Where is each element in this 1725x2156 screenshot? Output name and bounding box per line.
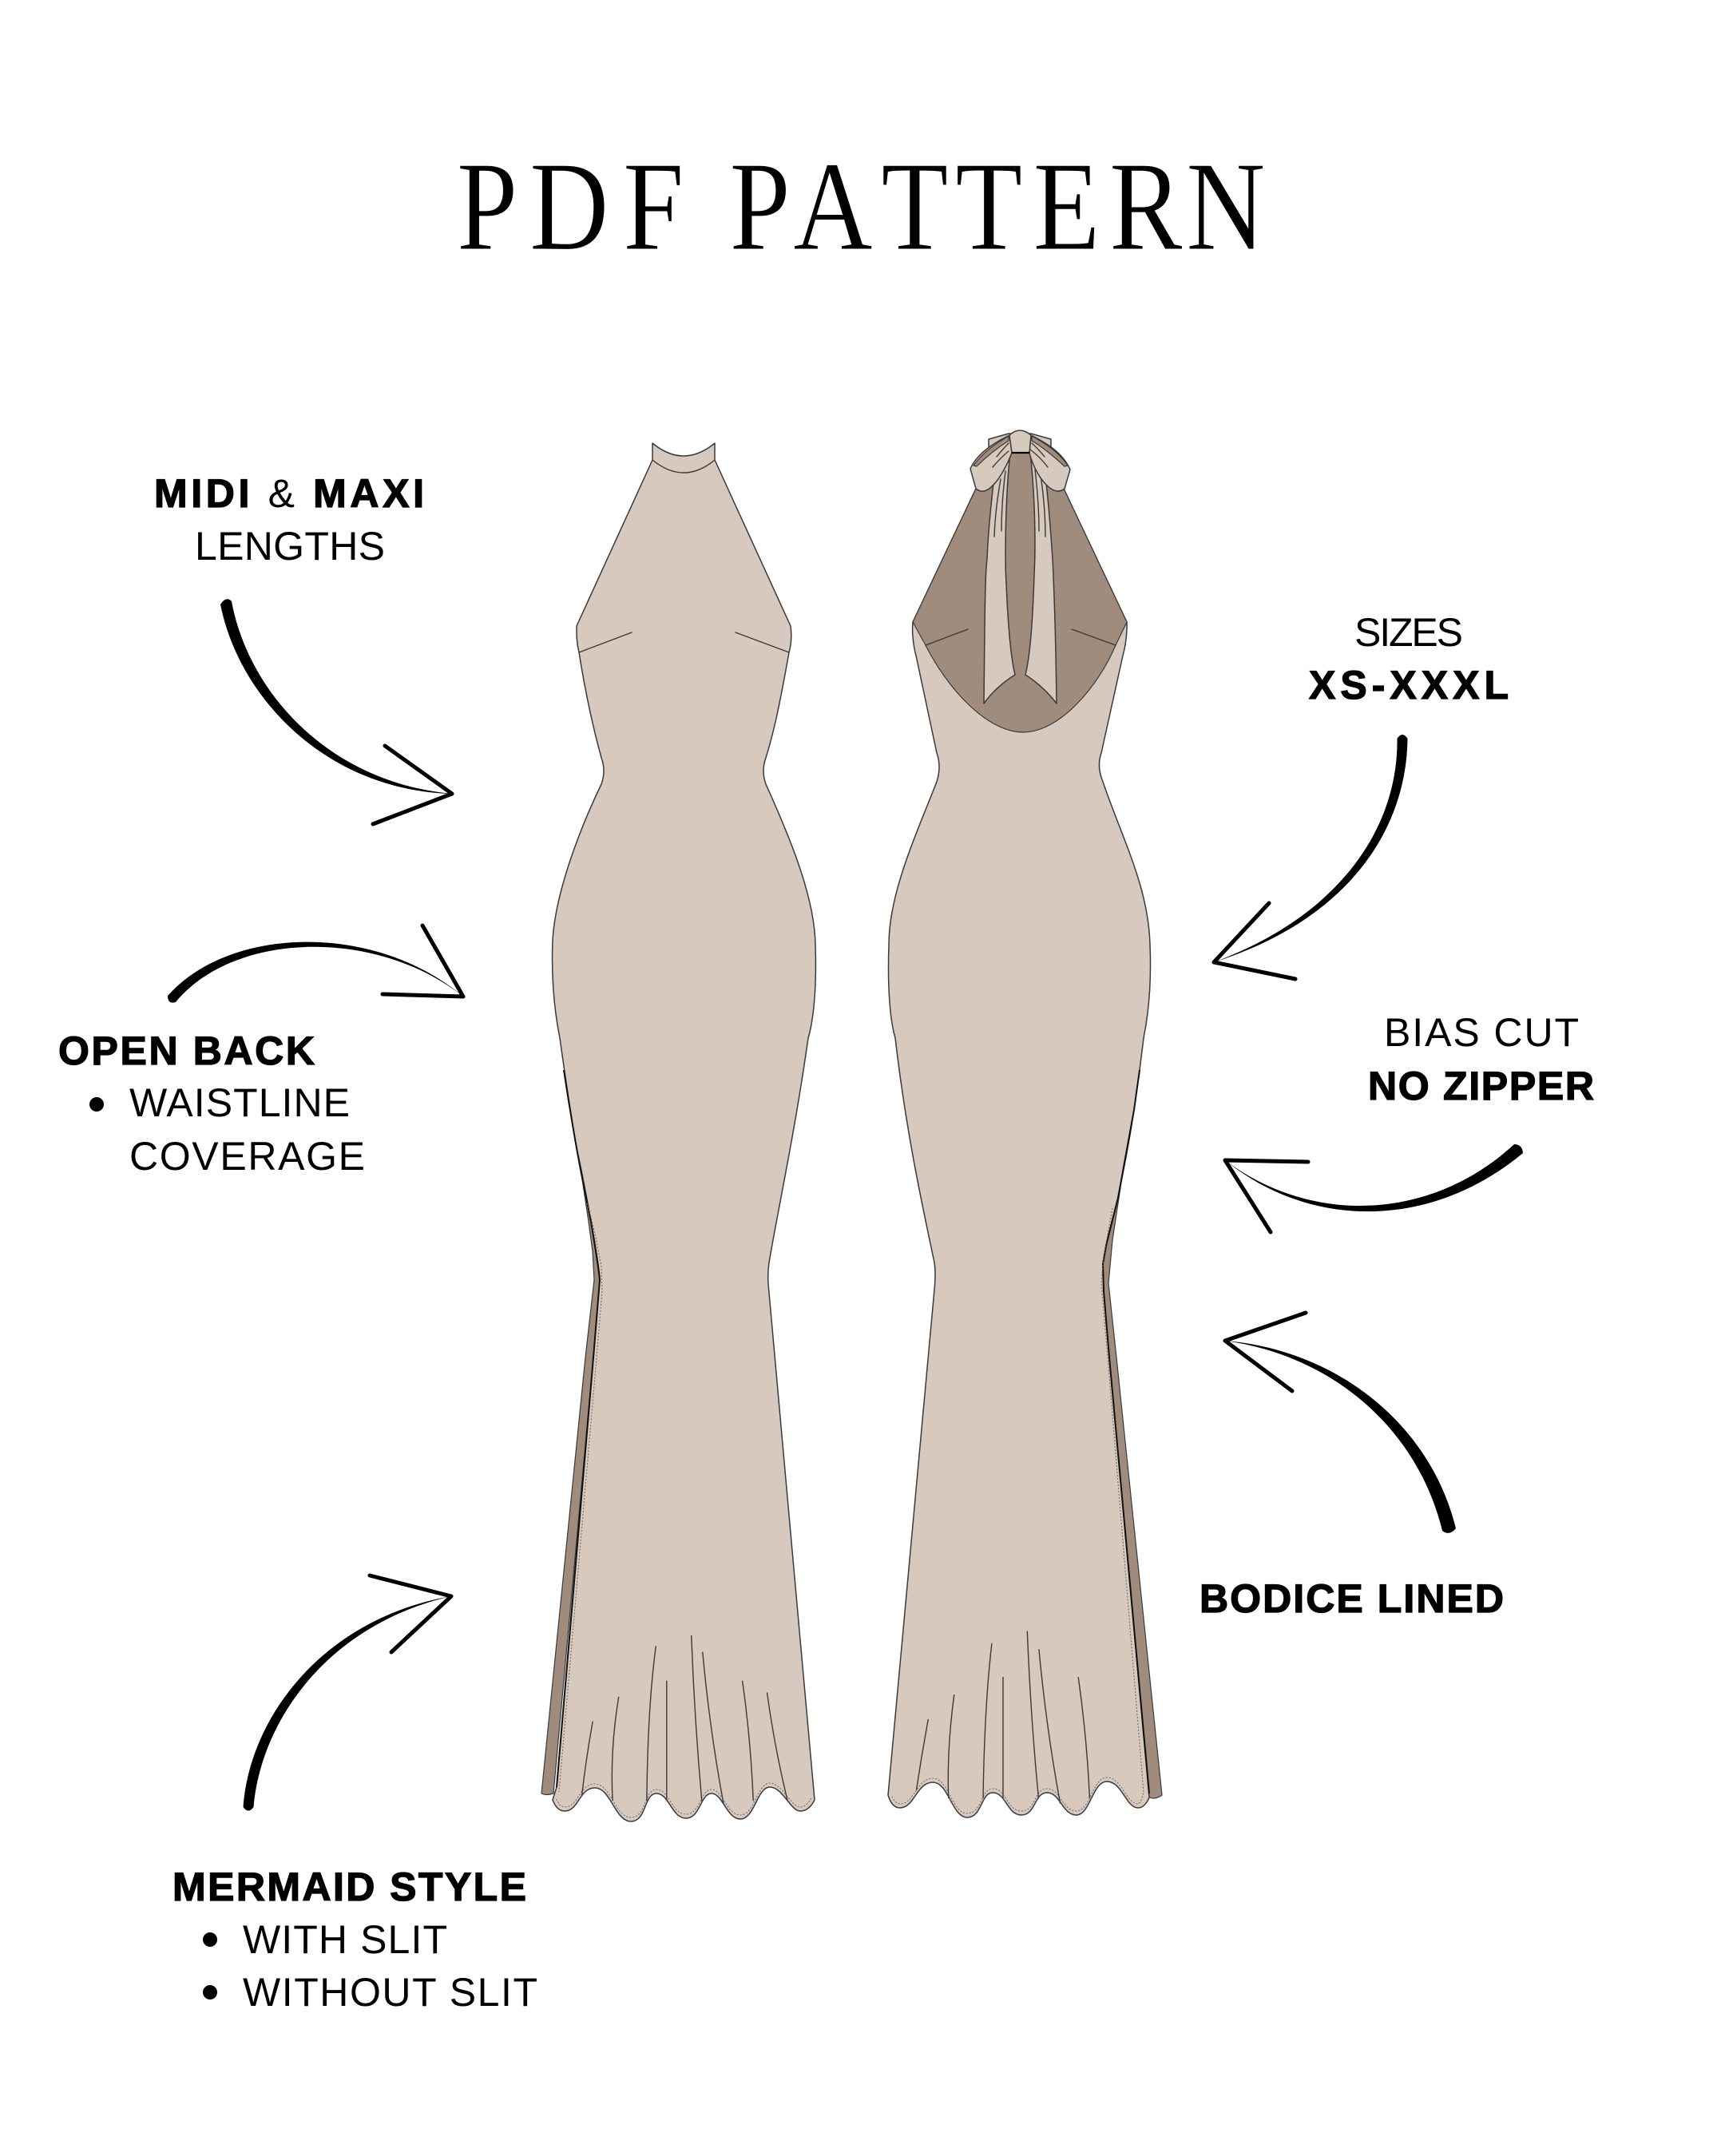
tie gathers [994, 470, 1045, 537]
front dress: collar seam [652, 460, 715, 473]
callout: open back [58, 1028, 365, 1179]
callout: mermaid style: MERMAID STYLE [172, 1865, 526, 1909]
bow right loop [1029, 435, 1070, 491]
callout: mermaid style [172, 1865, 537, 2015]
callout: open back: COVERAGE [129, 1134, 365, 1179]
bow knot [1009, 430, 1031, 453]
front dress: body [553, 443, 815, 1821]
front dress: stitching [556, 1203, 811, 1817]
arrow: midi and maxi lengths [220, 599, 452, 824]
back dress: darts [926, 629, 1116, 645]
callout: open back: OPEN BACK [58, 1028, 315, 1073]
front dress: hem pleats [582, 1635, 787, 1803]
callout: sizes: SIZES [1354, 610, 1463, 655]
back dress: hem pleats [917, 1631, 1089, 1803]
front dress: bust darts [579, 632, 789, 652]
callout: midi and maxi lengths: LENGTHS [195, 524, 385, 569]
bullet [203, 1985, 217, 1999]
callout: bodice lined: BODICE LINED [1200, 1576, 1504, 1621]
bow back layer [989, 434, 1051, 447]
front dress: slit lining [541, 1174, 600, 1795]
callout: bias cut, no zipper: NO ZIPPER [1368, 1064, 1594, 1108]
callout: mermaid style: WITHOUT SLIT [243, 1970, 537, 2015]
callout: mermaid style: WITH SLIT [243, 1917, 447, 1962]
arrow: mermaid style [243, 1575, 451, 1811]
arrow: open back [168, 925, 463, 1003]
bow folds [993, 443, 1048, 467]
callout: sizes [1309, 610, 1509, 707]
callout: bias cut, no zipper: BIAS CUT [1384, 1010, 1579, 1055]
front dress: slit edge [557, 1070, 600, 1787]
back dress: slit lining [1103, 1134, 1162, 1798]
bow left loop [970, 435, 1012, 491]
right tie [1025, 453, 1057, 703]
arrow: sizes [1214, 735, 1407, 979]
arrow: bias cut, no zipper [1225, 1144, 1523, 1232]
back dress: stitching [891, 1208, 1144, 1813]
bullet [203, 1932, 217, 1947]
bow loop openings [974, 436, 1068, 466]
bullet [89, 1097, 104, 1112]
title: PDF PATTERN [457, 136, 1266, 277]
left tie [984, 453, 1015, 703]
back dress: halter ties and bow [970, 430, 1070, 703]
callout: midi and maxi lengths: MIDI & MAXI [154, 471, 424, 516]
back dress illustration [888, 430, 1162, 1817]
callout: bias cut, no zipper [1368, 1010, 1594, 1108]
callout: open back: WAISTLINE [129, 1080, 350, 1125]
callout: sizes: XS-XXXL [1309, 663, 1509, 707]
front dress illustration [541, 443, 815, 1821]
callout: midi and maxi lengths [154, 471, 424, 569]
back dress: slit edge [1103, 1070, 1149, 1793]
arrow: bodice lined [1225, 1313, 1456, 1533]
back dress: open back panel [913, 447, 1127, 732]
back dress: body [888, 489, 1151, 1817]
